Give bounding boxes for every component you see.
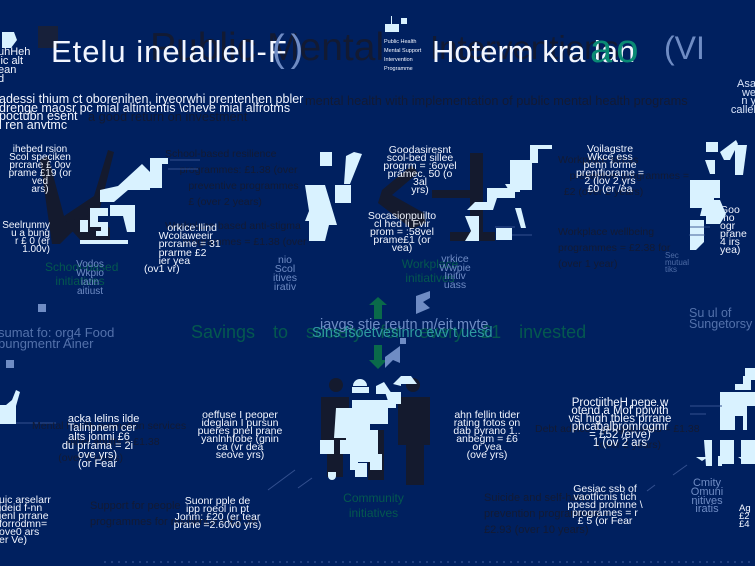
heading: dark title left: Public Mental (150, 26, 384, 69)
heading: savings green: Savings to society for every £1 invested (191, 322, 586, 342)
heading: teal glyphs: ao (590, 27, 642, 71)
text block: blue right note: Su ul of Sungetorsy (689, 306, 752, 331)
text block: white support: Suonr pple de ipp roeol in pt Jonm: £20 (er tear prane =2.60v0 yrs) (174, 495, 261, 531)
text block: dark support: Support for people programmes for resilience = £2.38 (90, 500, 257, 528)
text block: white reading group: ahn fellin tider rating fotos on dab pyrano 1.. anbegm = £6 or yea (ove yrs) (453, 409, 521, 461)
text block: centre workplace block: Socasionpuilto cl hed li Fvir prom = :58vel prame£1 (or vea) (368, 210, 436, 254)
icon: pale figure second (305, 152, 362, 241)
text block: white suicide: Gesiac ssb of vaotficnis tich ppesd prolmne \ programes = r £ 5 (or Fear (567, 483, 643, 527)
label: workplace initiatives green: Workplace initiatives (402, 257, 458, 285)
text block: dark community note: Mental health promotion services older adults = £1.38 (over 2 years) (32, 420, 186, 464)
text block: white older adults: acka lelins ilde Talinpnem cer alts jonmi £6 du prrama = 2i ove yrs) (or Fear (59, 413, 139, 470)
text block: dark workplace programme: Workplace-based anti-stigma programmes = £1.38 (over (165, 220, 307, 248)
connector lines (16, 160, 722, 491)
heading: white title left: Etelu inelallell-F (51, 34, 288, 69)
icon: dark figure centre (378, 153, 495, 241)
arrow: down green (369, 345, 387, 369)
text block: left resilience block: Seelrunmy u a bung r £ 0 (er 1.00v) (2, 220, 50, 255)
text block: bottom right fragment: Ag £2 £4 (739, 503, 751, 530)
text block: white bottom left: uic arselarr ideid f-nn ienl prrane forrodmn= ove0 ars er Ve) (0, 494, 51, 546)
arrow: blue up fragment (416, 291, 430, 314)
heading: blue glyphs right: (VI (664, 30, 705, 66)
icon: pale figure school (80, 158, 168, 244)
label: school initiatives green: School-based initiatives (45, 260, 118, 288)
label: workplace initiatives blue: vrkice Wwpie Initiv uass (439, 253, 471, 290)
text block: dark suicide: Suicide and self-harm prevention programmes = £2.93 (over 10 years) (484, 492, 610, 536)
marker: blue squares (6, 304, 406, 368)
label: community blue right: Cmity Omuni nitives iratis (691, 477, 723, 515)
text block: dark introduction: mental health with implementation of public mental health programs (305, 93, 688, 108)
text block: white workplace left: orkice:llind Wcolaweeir prcrame = 31 prarme £2 ier yea (ov1 vr) (144, 222, 221, 275)
heading: savings teal: Sins fsoetvesinro evv t uesd (312, 325, 493, 341)
text block: white introduction: adessi thium ct oborenihen, iryeorwhi prentenhen pbler drenge maosr pc mial altintentis \cheve mial alfrotms poctubn esent l ren anvtmc (0, 92, 303, 132)
icon: pale figure centre (465, 145, 552, 241)
text block: dark workplace centre: Workplace stress preventive programmes = £2 (over 2 years) (558, 154, 689, 198)
heading: savings blue: iavgs stie reutn m/eit mvte (320, 317, 488, 333)
label: far right blue: Sec mutual tiks (665, 251, 689, 274)
text block: small note centre: Public Health Mental Support Intervention Programme (384, 39, 421, 72)
text block: centre school block: Goodasiresnt scol-bed sillee progrm = :6ovel pramec. 50 (o 3al yrs) (383, 144, 457, 196)
heading: white title right: Hoterm kra lan (432, 34, 635, 69)
heading: blue glyphs left: () (272, 28, 309, 70)
label: school initiatives blue: Vodos Wkpio iatin aitiust (76, 259, 104, 297)
icon: dark figure left (40, 150, 114, 244)
text block: white peer support: oeffuse I peoper ideglain I pursun pueres pnel prane yanlnhfobe (gnin ca (vr dea seove yrs) (198, 409, 282, 461)
heading: dark title right: Interventions (430, 29, 619, 66)
dotted line (104, 561, 755, 563)
text block: left school block: ihebed rsion Scol speciken prcrane £ 0ov prame £19 (or ved ars) (9, 144, 71, 195)
icon: dark figure top left (38, 26, 58, 48)
arrow: up green (369, 297, 387, 319)
text block: dark introduction second line: a good return on investment (88, 109, 247, 124)
text block: dark anti stigma right: Workplace wellbeing programmes = £2.38 for (over 1 year) (558, 226, 670, 270)
label: community initiatives green: Community initiatives (343, 491, 404, 520)
text block: dark reading note: Debt advice + programmes = £1.38 (over 2 years) (535, 423, 700, 451)
text block: white workplace right: Voilagstre Wkce ess penn forme prentfiorame = 2 (lov 2 yrs £0 (er /ea (576, 143, 644, 195)
icon: dark community figures (321, 378, 430, 485)
text block: white prescribing: ProctiitheH pepe w otend a Mof ppivith vsl high tbles prrane phcabalbromrogmr = £52 /erve) 1 (ov 2 ars (569, 397, 671, 449)
icon: pale figure right (690, 140, 747, 250)
label: blue initiatives centre: nio Scol itives irativ (273, 254, 297, 293)
icon: white figure left edge (0, 390, 20, 424)
text block: far right fragment: Goo mo ogr prane 4 irs yea) (720, 204, 747, 256)
icon: pale figures right edge (696, 368, 755, 466)
arrow: blue down fragment (385, 346, 400, 368)
icon: pale community figures (320, 376, 417, 480)
text block: dark school programme: School-based resilience programmes: £1.38 (over preventive programmes £ (over 2 years) (165, 148, 299, 208)
text block: blue left note: sumat fo: org4 Food bungmentr Ainer (0, 325, 114, 351)
